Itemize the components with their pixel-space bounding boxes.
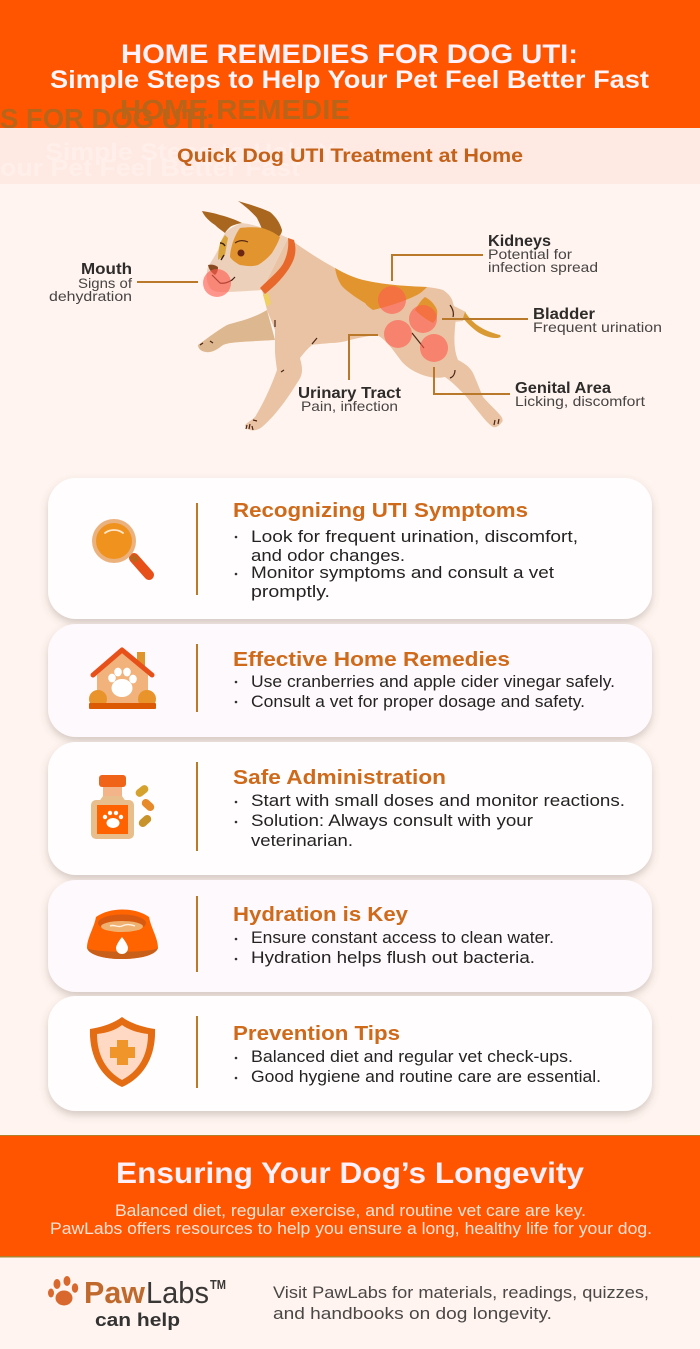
logo: PawLabs [48,1275,226,1330]
panel: hydration [48,880,652,992]
spot: mouth [203,269,231,297]
footer text: and handbooks on dog longevity. [273,1304,552,1323]
heading: Recognizing UTI Symptoms [233,500,528,522]
banner text: PawLabs offers resources to help you ensure a long, healthy life for your dog. [50,1220,652,1238]
callout: bladder [442,306,662,335]
logo: PawLabs: TM [210,1277,226,1292]
callout: mouth: Signs of [78,275,132,291]
text block: Solution: Always consult with your [251,812,534,830]
section band: quick treatment [0,128,700,184]
callout: urinary tract: Urinary Tract [298,385,402,402]
text block: Start with small doses and monitor reactions. [251,792,625,810]
callout: urinary tract [298,335,402,414]
collar [260,238,295,294]
header banner: S FOR DOG UTI: [0,103,215,134]
text block [235,673,615,711]
panel: safe administration [48,742,652,875]
text block [235,528,578,601]
callout: kidneys: Kidneys [488,233,551,250]
spot: genital area [420,334,448,362]
far front leg [198,310,275,352]
banner text: Balanced diet, regular exercise, and routine vet care are key. [115,1202,586,1220]
callout: bladder: Bladder [533,306,595,323]
panel: home remedies [48,624,652,737]
band heading: Quick Dog UTI Treatment at Home [177,145,523,167]
footer banner: longevity [0,1135,700,1258]
panel: prevention [48,996,652,1111]
panel: recognizing symptoms [48,478,652,619]
collar tag [263,293,271,307]
text block: Consult a vet for proper dosage and safety. [251,693,585,711]
logo: PawLabs: Labs [146,1275,209,1310]
spot: kidneys [378,286,406,314]
banner text [50,1202,652,1238]
text block: Monitor symptoms and consult a vet [251,564,554,582]
callout: genital area [434,367,645,409]
callout: urinary tract: Pain, infection [301,398,398,414]
head patches [230,227,280,266]
heading: Hydration is Key [233,904,409,926]
text block [235,1048,601,1086]
tail [452,305,501,338]
heading: Safe Administration [233,767,446,789]
spot: bladder [409,305,437,333]
text block: Balanced diet and regular vet check-ups. [251,1048,573,1066]
callout: mouth: Mouth [81,261,132,278]
text block [235,792,625,850]
callout: kidneys: Potential for [488,246,572,262]
text block: Use cranberries and apple cider vinegar safely. [251,673,615,691]
title: HOME REMEDIES FOR DOG UTI: [121,39,578,69]
callout: kidneys [392,233,598,281]
callout: genital area: Genital Area [515,380,611,397]
text block [235,929,554,967]
text block: Ensure constant access to clean water. [251,929,554,947]
icon: water bowl [87,910,158,959]
text block: Hydration helps flush out bacteria. [251,949,535,967]
footer text: Visit PawLabs for materials, readings, quizzes, [273,1283,649,1302]
ears [202,211,242,233]
header banner: HOME REMEDIE [120,94,350,125]
text block: Good hygiene and routine care are essential. [251,1068,601,1086]
icon: paw [48,1276,78,1306]
icon: house with paw [89,650,156,709]
heading: Effective Home Remedies [233,649,510,671]
fold and toe marks [200,305,499,430]
body [245,238,503,430]
section band: quick treatment: Simple Steps to Help Yo [45,139,350,166]
text block: and odor changes. [251,547,405,565]
callout: mouth: dehydration [49,288,132,304]
section band: quick treatment: our Pet Feel Better Fast [0,155,300,182]
hip patch [415,297,437,323]
callout: kidneys: infection spread [488,259,598,275]
back patch [335,268,427,310]
spot: urinary tract [384,320,412,348]
heading: Prevention Tips [233,1023,400,1045]
text block: promptly. [251,583,330,601]
banner heading: Ensuring Your Dog’s Longevity [116,1157,584,1190]
icon: magnifying glass [92,519,149,575]
muzzle and nose [208,265,218,275]
text block: veterinarian. [251,832,353,850]
subtitle: Simple Steps to Help Your Pet Feel Better Fast [50,66,650,94]
text block: Look for frequent urination, discomfort, [251,528,578,546]
dog illustration [198,201,503,430]
callout: bladder: Frequent urination [533,319,662,335]
callout: mouth [49,261,198,304]
head [207,223,288,292]
callout: genital area: Licking, discomfort [515,393,645,409]
header banner [0,0,700,134]
icon: shield with cross [90,1017,155,1087]
footer text [273,1283,649,1323]
icon: medicine bottle and pills [91,775,156,839]
logo: PawLabs: can help [95,1310,180,1330]
logo: PawLabs: Paw [84,1275,146,1310]
